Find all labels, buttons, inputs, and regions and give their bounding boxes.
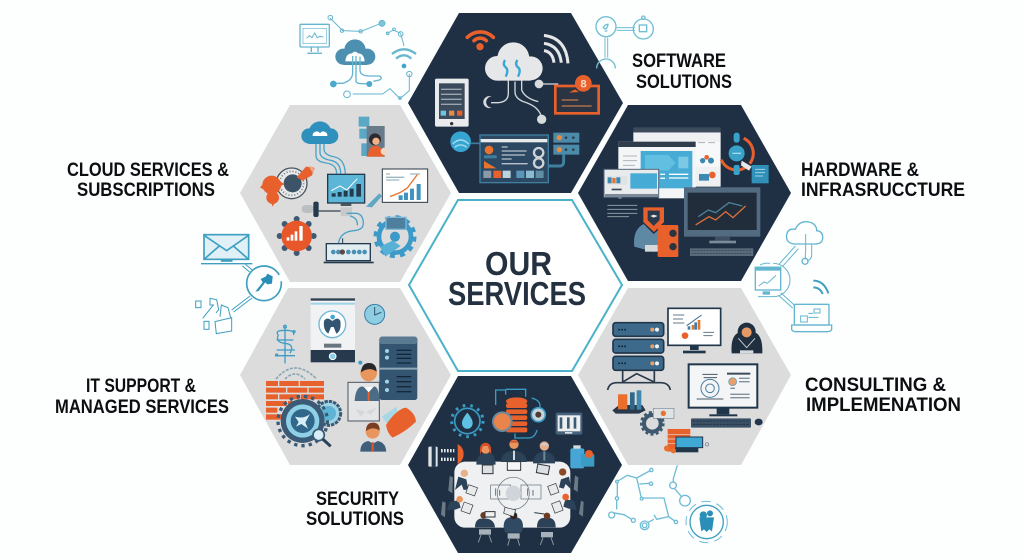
icon: outline laptop: [792, 304, 832, 332]
icon: blue circle: [450, 131, 481, 152]
icon: clock: [365, 304, 385, 324]
icon: connector plug: [302, 202, 352, 217]
icon: teal gear: [375, 217, 415, 257]
decorative icons: top left cloud network: [300, 15, 416, 99]
label: consulting and implementation: CONSULTING &: [805, 375, 946, 396]
icon: server rack: [613, 323, 664, 370]
icon: small front window: [604, 169, 659, 199]
icon: man in suit: [360, 423, 386, 452]
title: OUR: [485, 245, 552, 282]
rack lights: [618, 328, 659, 365]
icon: orange screen with badge: [555, 75, 599, 113]
people on left side: [441, 470, 478, 517]
label: IT support and managed services: IT SUPPORT &: [86, 376, 196, 397]
icon: wifi arcs: [813, 281, 828, 294]
icon: rear browser window: [633, 127, 721, 187]
icon: outline cloud: [786, 222, 823, 244]
decorative icons: top right nodes: [596, 16, 653, 68]
icon: droplet gear: [452, 405, 483, 437]
icon: houses: [196, 298, 232, 334]
icon: monitor with chart: [668, 308, 721, 353]
title: SERVICES: [448, 275, 586, 312]
connector lines: [232, 264, 252, 312]
title: [448, 245, 586, 312]
icon: person card: [359, 117, 388, 157]
icon: cyan cloud wires: [504, 60, 520, 77]
icon: chain arc: [276, 368, 317, 379]
icon: gear and tag: [641, 408, 674, 434]
icon: line monitor: [300, 24, 329, 53]
icon: tablet: [556, 413, 582, 435]
icon: router: [324, 238, 374, 263]
icon: rack stand: [608, 371, 670, 390]
icon: tablet: [435, 79, 469, 127]
icon: circuit around database: [496, 389, 540, 438]
label: hardware and infrastructure: INFRASRUCCTURE: [801, 180, 965, 201]
panel: IT support hexagon: [240, 288, 451, 465]
label: consulting and implementation: [805, 375, 961, 416]
people at top of table: [476, 440, 555, 475]
label: software solutions: [632, 51, 732, 93]
people on right side: [548, 468, 584, 517]
icon: middle browser window: [618, 142, 696, 198]
icon: orange badge: [643, 207, 664, 232]
panel: software solutions hexagon: [408, 13, 623, 193]
icon: orange stack with display: [664, 429, 709, 453]
icon: envelope: [201, 235, 252, 264]
icon: status panel: [311, 298, 355, 362]
icon: orange megaphone: [382, 407, 416, 438]
connector lines: [779, 246, 798, 308]
label: IT support and managed services: MANAGED SERVICES: [55, 397, 229, 418]
label: cloud services and subscriptions: [67, 160, 229, 201]
icon: dashed circle with basket: [686, 501, 727, 543]
icon: right containers: [570, 445, 594, 468]
icons: consulting: [608, 308, 763, 453]
label: software solutions: SOFTWARE: [632, 51, 726, 72]
icons: IT support: [266, 298, 417, 452]
icon: monitor with line chart: [684, 187, 760, 256]
decorative icons: bottom right circuit: [609, 465, 727, 543]
icon: orange ring: [715, 131, 769, 183]
label: security solutions: SOLUTIONS: [306, 509, 404, 530]
icon: cloud: [485, 42, 543, 81]
cloud wires: [316, 144, 345, 174]
icon: orange gear with bars: [277, 216, 317, 256]
connector wires: [491, 80, 558, 118]
panel: consulting hexagon: [578, 288, 791, 465]
label: security solutions: SECURITY: [316, 489, 399, 510]
label: hardware and infrastructure: [801, 160, 965, 201]
icon: dark teal cloud: [335, 39, 375, 65]
decorative icons: left mail and house: [196, 235, 281, 334]
icon: white wifi: [544, 35, 568, 63]
icon: server units: [549, 133, 579, 166]
icons: software solutions: [435, 32, 599, 183]
circuit traces: [613, 465, 683, 523]
icon: wifi: [392, 49, 416, 68]
icon: node circle: [247, 266, 281, 301]
icon: large monitor: [689, 364, 763, 428]
label: cloud services and subscriptions: SUBSCRIPTIONS: [77, 180, 215, 201]
icons: cloud services: [260, 117, 428, 263]
icon: dashboard panel: [480, 135, 548, 183]
label: IT support and managed services: [55, 376, 229, 418]
icon: server tower: [379, 337, 417, 400]
icons: hardware: [604, 127, 769, 257]
panel: center our services hexagon: [409, 200, 622, 371]
cloud connectors: [330, 56, 381, 87]
label: cloud services and subscriptions: CLOUD SERVICES &: [67, 160, 229, 181]
icon: circuit lines: [328, 15, 412, 99]
icon: database stack: [506, 397, 527, 432]
icon: presenter card: [348, 361, 379, 421]
icon: side rings: [493, 408, 545, 431]
icon: conference table: [454, 462, 570, 528]
icon: figure and speaker: [634, 224, 678, 257]
icon: hooded person: [731, 323, 762, 353]
label: consulting and implementation: IMPLEMENATION: [806, 395, 961, 416]
icons: security: [428, 389, 594, 546]
decorative icons: right cloud network: [755, 222, 832, 332]
panel: cloud services hexagon: [240, 105, 451, 282]
text lines: [607, 205, 637, 217]
icon: teal cloud: [301, 121, 338, 144]
people at bottom of table: [475, 507, 556, 546]
label: software solutions: SOLUTIONS: [636, 72, 732, 93]
icon: small gear: [317, 401, 341, 425]
icon: dial with orange mascot: [260, 166, 315, 207]
label: hardware and infrastructure: HARDWARE &: [801, 160, 919, 181]
icon: bar stack: [612, 390, 646, 414]
panel: hardware and infrastructure hexagon: [578, 105, 791, 281]
router wires: [338, 213, 363, 244]
icon: monitor with bars: [328, 174, 365, 206]
icon: node circle with chart: [755, 263, 790, 297]
label: security solutions: [306, 489, 404, 530]
icon: brick wall: [266, 381, 324, 420]
icon: left cabinet: [428, 444, 464, 467]
connector nodes: [483, 80, 546, 124]
icon: chart card: [366, 169, 428, 207]
icon: orange wifi: [467, 32, 493, 50]
icon: network tree: [275, 325, 295, 363]
panel: security solutions hexagon: [408, 376, 622, 553]
icon: orange screen with badge: 8: [580, 79, 587, 91]
icon: large gear with magnifier: [278, 396, 331, 446]
